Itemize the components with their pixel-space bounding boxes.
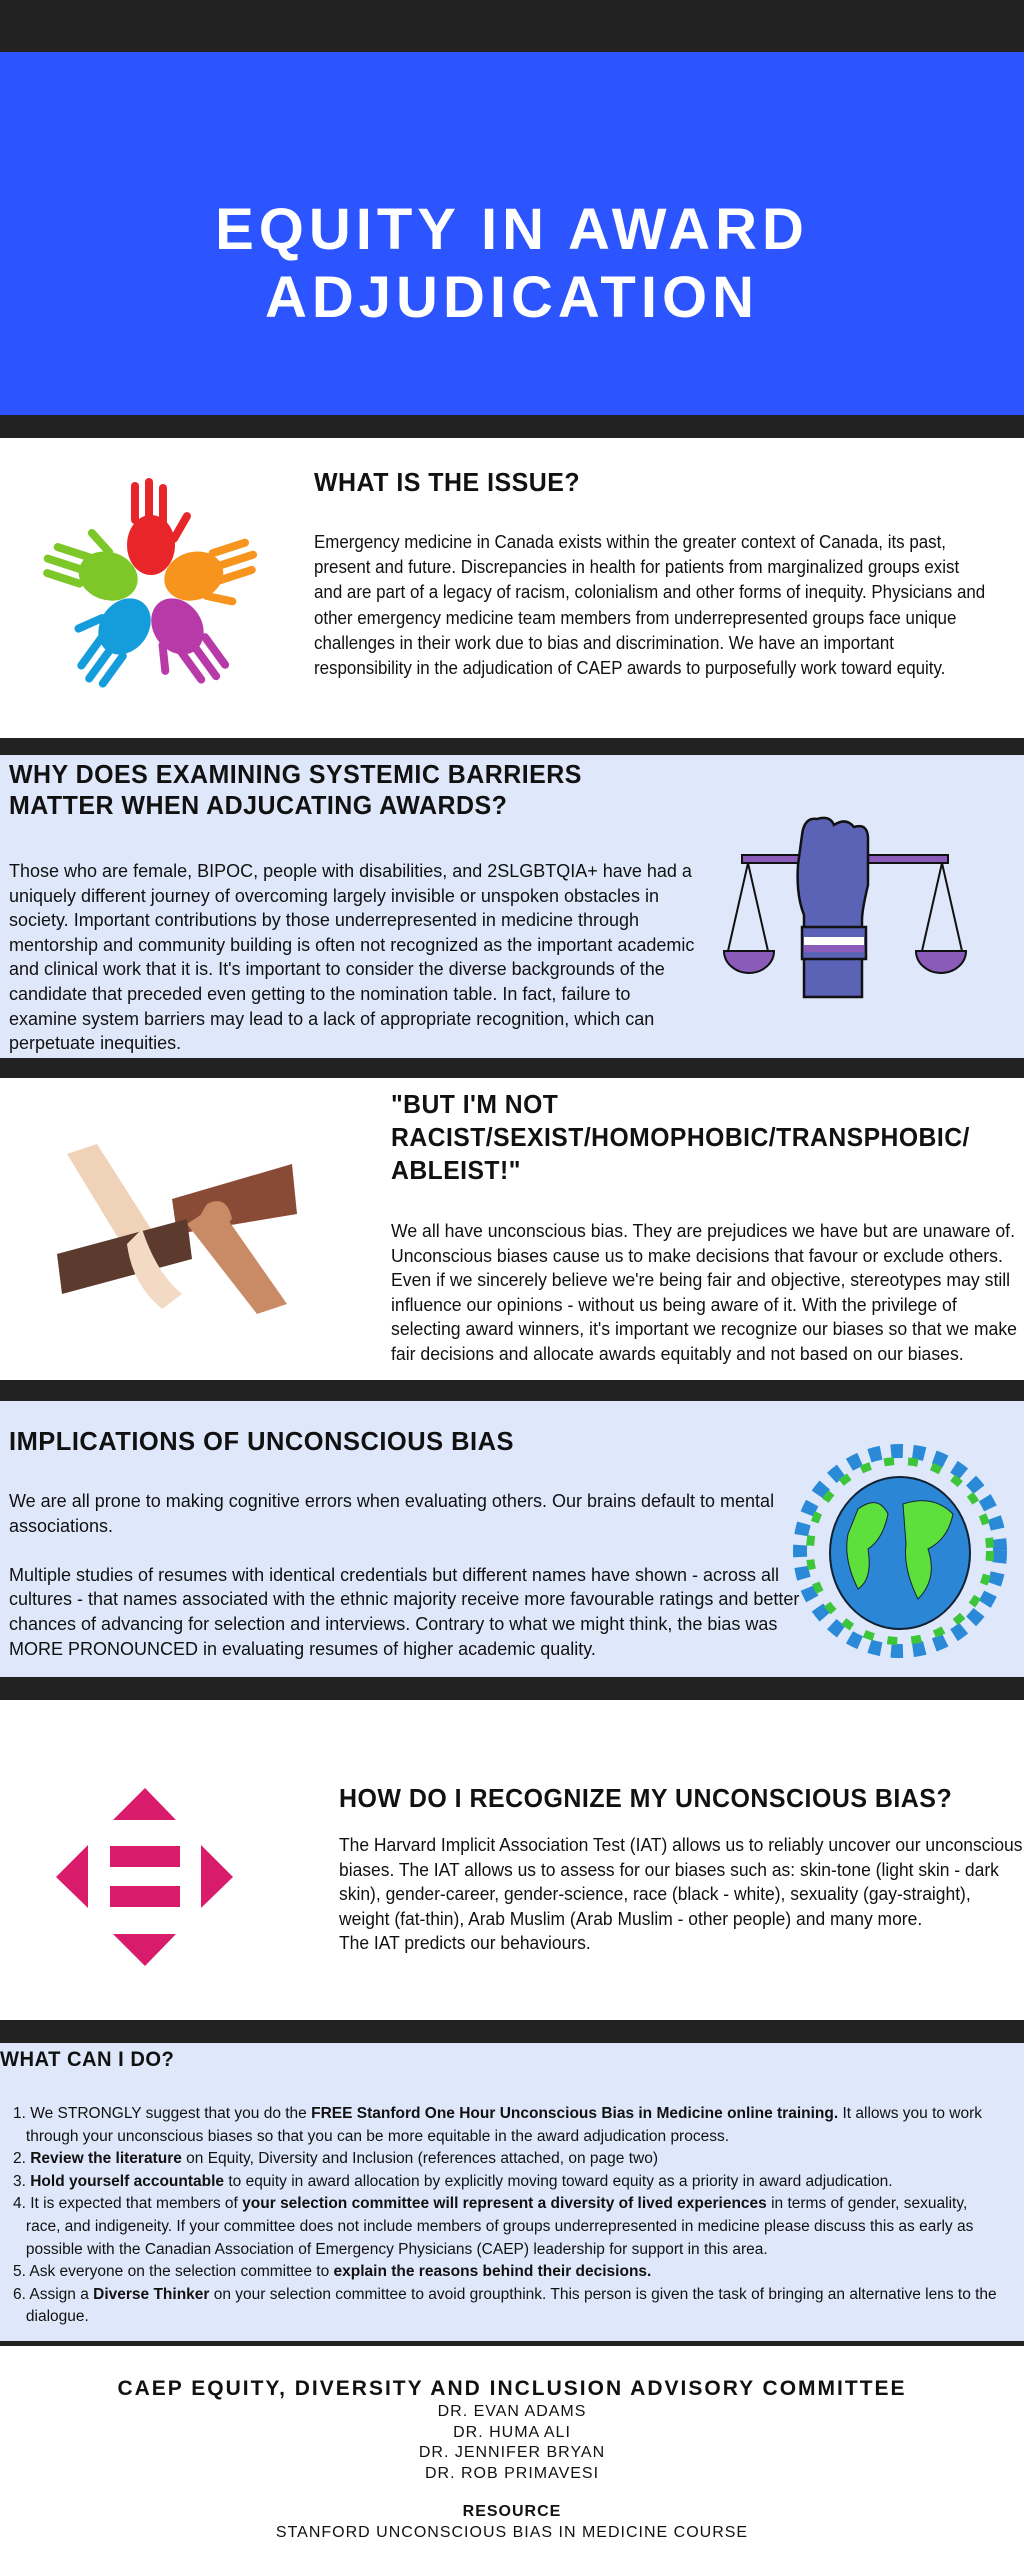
text: IAT body: weight (fat-thin), Arab Muslim (Arab Muslim - other people) and many more.: [339, 1909, 922, 1929]
heading: but I'm not: "BUT I'M NOT: [391, 1089, 558, 1119]
text: unconscious bias body: Unconscious biases cause us to make decisions that favour or exclude others.: [391, 1246, 1003, 1266]
text: unconscious bias body: Even if we sincerely believe we're being fair and objective, stereotypes may still: [391, 1270, 1010, 1290]
panel: recognize: [0, 1700, 1024, 2020]
text: resource: [276, 2503, 748, 2541]
list: actions: through your unconscious biases so that you can be more equitable in the award adjudication process.: [26, 2128, 729, 2145]
footer: committee credits: [117, 2377, 907, 2541]
panel: what is the issue: [0, 438, 1024, 738]
text: resource: STANFORD UNCONSCIOUS BIAS IN MEDICINE COURSE: [276, 2524, 748, 2541]
text: unconscious bias body: We all have unconscious bias. They are prejudices we have but are unaware of.: [391, 1221, 1015, 1241]
list: actions: race, and indigeneity. If your committee does not include members of groups underrepresented in medicine please discuss this as early as: [26, 2218, 973, 2235]
text: implications body: We are all prone to making cognitive errors when evaluating others. Our brains default to mental: [9, 1491, 774, 1511]
text: IAT body: [339, 1835, 1023, 1953]
text: IAT body: skin), gender-career, gender-science, race (black - white), sexuality (gay-straight),: [339, 1884, 971, 1904]
list: actions: possible with the Canadian Association of Emergency Physicians (CAEP) leadership for support in this area.: [26, 2241, 768, 2258]
text: unconscious bias body: [391, 1221, 1017, 1364]
list: actions: 3. Hold yourself accountable to equity in award allocation by explicitly moving toward equity as a priority in award adjudication.: [13, 2173, 893, 2190]
list: actions: 1. We STRONGLY suggest that you do the FREE Stanford One Hour Unconscious Bias in Medicine online training. It allows you to work: [13, 2105, 982, 2122]
icon: linked hands: [57, 1144, 297, 1314]
text: barriers body: uniquely different journey of overcoming largely invisible or unspoken obstacles in: [9, 886, 659, 906]
title: [215, 197, 809, 330]
text: issue body: Emergency medicine in Canada exists within the greater context of Canada, its past,: [314, 532, 946, 552]
heading: implications: IMPLICATIONS OF UNCONSCIOUS BIAS: [9, 1426, 514, 1456]
text: barriers body: mentorship and community building is often not recognized as the important academic: [9, 935, 694, 955]
text: barriers body: Those who are female, BIPOC, people with disabilities, and 2SLGBTQIA+ have had a: [9, 861, 692, 881]
list: actions: 6. Assign a Diverse Thinker on your selection committee to avoid groupthink. This person is given the task of bringing an alternative lens to the: [13, 2286, 997, 2303]
panel: but I'm not: [0, 1078, 1024, 1380]
text: issue body: responsibility in the adjudication of CAEP awards to purposefully work toward equity.: [314, 658, 945, 678]
text: barriers body: perpetuate inequities.: [9, 1033, 181, 1053]
text: unconscious bias body: selecting award winners, it's important we recognize our biases so that we make: [391, 1319, 1017, 1339]
text: issue body: challenges in their work due to bias and discrimination. We have an important: [314, 633, 894, 653]
text: implications body: associations.: [9, 1516, 113, 1536]
icon: fist with scales: [723, 816, 967, 998]
text: barriers body: candidate that preceded even getting to the nomination table. In fact, failure to: [9, 984, 630, 1004]
text: resource: RESOURCE: [463, 2503, 561, 2520]
text: names: DR. HUMA ALI: [453, 2424, 571, 2441]
list: actions: [13, 2105, 997, 2325]
heading: but I'm not: ABLEIST!": [391, 1155, 521, 1185]
text: issue body: and are part of a legacy of racism, colonialism and other forms of inequity. Physicians and: [314, 582, 985, 602]
panel: implications: [0, 1401, 1024, 1677]
icon: colorful hands: [43, 478, 258, 688]
list: actions: dialogue.: [26, 2308, 89, 2325]
text: barriers body: examine system barriers may lead to a lack of appropriate recognition, which can: [9, 1009, 654, 1029]
text: IAT body: The Harvard Implicit Association Test (IAT) allows us to reliably uncover our unconscious: [339, 1835, 1023, 1855]
text: implications body: [9, 1491, 800, 1659]
heading: systemic barriers: [9, 759, 582, 820]
panel: what can I do: [0, 2043, 1024, 2341]
heading: but I'm not: [391, 1089, 970, 1185]
panel: systemic barriers: [0, 755, 1024, 1058]
text: unconscious bias body: fair decisions and allocate awards equitably and not based on our biases.: [391, 1344, 964, 1364]
title banner: [0, 52, 1024, 415]
list: actions: 2. Review the literature on Equity, Diversity and Inclusion (references attached, on page two): [13, 2150, 658, 2167]
text: IAT body: biases. The IAT allows us to assess for our biases such as: skin-tone (light skin - dark: [339, 1860, 999, 1880]
text: names: DR. JENNIFER BRYAN: [419, 2444, 605, 2461]
text: implications body: MORE PRONOUNCED in evaluating resumes of higher academic quality.: [9, 1639, 596, 1659]
text: issue body: [314, 532, 985, 678]
text: names: DR. EVAN ADAMS: [438, 2403, 586, 2420]
icon: globe with people: [793, 1444, 1007, 1658]
text: implications body: cultures - that names associated with the ethnic majority receive more favourable ratings and better: [9, 1589, 799, 1609]
heading: but I'm not: RACIST/SEXIST/HOMOPHOBIC/TRANSPHOBIC/: [391, 1122, 970, 1152]
heading: what is the issue: WHAT IS THE ISSUE?: [314, 467, 580, 497]
title: ADJUDICATION: [265, 265, 759, 330]
heading: what can I do: WHAT CAN I DO?: [0, 2048, 174, 2071]
text: IAT body: The IAT predicts our behaviours.: [339, 1933, 591, 1953]
heading: systemic barriers: WHY DOES EXAMINING SYSTEMIC BARRIERS: [9, 759, 582, 789]
text: names: [419, 2403, 605, 2482]
text: barriers body: society. Important contributions by those underrepresented in medicine through: [9, 910, 639, 930]
icon: equality arrows: [56, 1788, 233, 1966]
text: unconscious bias body: influence our opinions - without us being aware of it. With the privilege of: [391, 1295, 957, 1315]
text: implications body: Multiple studies of resumes with identical credentials but different names have shown - across all: [9, 1565, 779, 1585]
heading: committee: CAEP EQUITY, DIVERSITY AND INCLUSION ADVISORY COMMITTEE: [117, 2377, 907, 2400]
list: actions: 4. It is expected that members of your selection committee will represent a diversity of lived experiences in terms of gender, sexuality,: [13, 2195, 967, 2212]
title: EQUITY IN AWARD: [215, 197, 809, 262]
heading: systemic barriers: MATTER WHEN ADJUCATING AWARDS?: [9, 790, 507, 820]
text: issue body: present and future. Discrepancies in health for patients from marginalized groups exist: [314, 557, 959, 577]
text: implications body: chances of advancing for selection and interviews. Contrary to what we might think, the bias was: [9, 1614, 777, 1634]
text: barriers body: [9, 861, 694, 1053]
text: names: DR. ROB PRIMAVESI: [425, 2465, 599, 2482]
text: issue body: other emergency medicine team members from underrepresented groups face unique: [314, 608, 956, 628]
heading: recognize: HOW DO I RECOGNIZE MY UNCONSCIOUS BIAS?: [339, 1783, 952, 1813]
list: actions: 5. Ask everyone on the selection committee to explain the reasons behind their decisions.: [13, 2263, 651, 2280]
text: barriers body: and clinical work that it is. It's important to consider the diverse backgrounds of the: [9, 959, 665, 979]
